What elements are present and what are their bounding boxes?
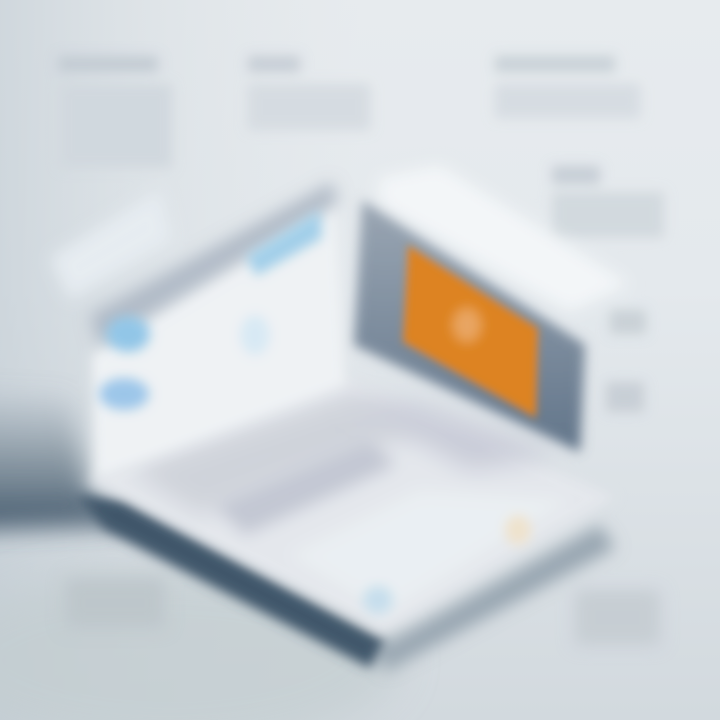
upper base shade: [345, 400, 560, 470]
blue header: [246, 210, 322, 276]
background bottom left tint: [0, 570, 400, 720]
top middle text block: [248, 56, 370, 130]
top right text block: [495, 56, 640, 118]
orange display: [403, 245, 538, 418]
right screen back: [378, 165, 630, 312]
dark key band: [215, 440, 395, 535]
right text block: [552, 166, 664, 238]
pale blue mark: [240, 315, 270, 355]
pale card left: [50, 190, 172, 300]
centre icon: [452, 307, 482, 343]
keyboard area: [130, 395, 430, 515]
blurred scene: [0, 56, 664, 672]
yellow accent: [505, 515, 531, 545]
left screen panel: [90, 182, 345, 480]
bottom text blocks: [65, 578, 660, 645]
top edge: [90, 182, 338, 345]
trackpad panel: [290, 490, 570, 615]
laptop base: [88, 380, 616, 634]
laptop shadow right: [375, 525, 615, 672]
right small labels: [606, 310, 646, 412]
right screen frame: [354, 200, 585, 452]
left side shadow: [0, 385, 130, 530]
blue label upper: [106, 316, 150, 352]
blue label lower: [99, 378, 149, 410]
top left text block: [58, 56, 172, 168]
laptop shadow left: [75, 495, 385, 668]
blue accent: [363, 586, 393, 614]
